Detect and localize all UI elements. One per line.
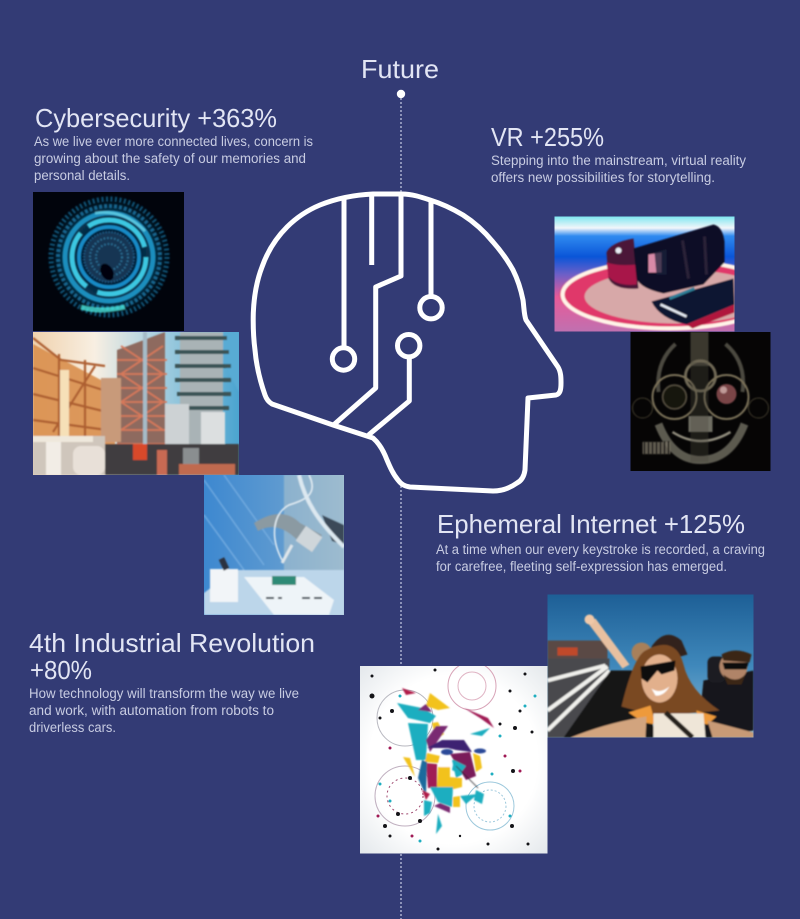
icon: circuit head (253, 194, 561, 491)
timeline start dot (397, 90, 405, 98)
heading: 4th Industrial Revolution (29, 628, 315, 658)
timeline dotted line (400, 98, 402, 919)
text block: 4th industrial revolution (29, 628, 315, 735)
photo: geometric polygon face (360, 666, 548, 854)
description (29, 686, 299, 735)
head outline (253, 194, 561, 491)
photo: VR headset (554, 216, 734, 332)
right node (420, 296, 442, 319)
description: driverless cars. (29, 720, 116, 735)
description: personal details. (34, 168, 130, 183)
circuit line with left node (342, 198, 346, 347)
heading: VR +255% (491, 122, 604, 152)
middle node (398, 334, 420, 357)
photo: industrial refinery (33, 332, 239, 475)
long bent circuit line (334, 195, 401, 425)
left node (332, 348, 355, 370)
short circuit line (369, 195, 374, 265)
circuit line with right node (428, 200, 434, 296)
description (491, 153, 746, 185)
description: At a time when our every keystroke is recorded, a craving (436, 542, 765, 557)
photo: robotic arm (204, 475, 344, 615)
photo: mechanical skull (630, 332, 770, 471)
heading: Ephemeral Internet +125% (437, 509, 745, 539)
description: for carefree, fleeting self-expression has emerged. (436, 559, 727, 574)
text block: ephemeral internet (436, 509, 765, 574)
title: Future (361, 54, 439, 84)
description: How technology will transform the way we live (29, 686, 299, 701)
heading (29, 628, 315, 685)
description (436, 542, 765, 574)
description: and work, with automation from robots to (29, 703, 274, 718)
description: Stepping into the mainstream, virtual reality (491, 153, 746, 168)
text block: VR (491, 122, 746, 185)
text block: cybersecurity (34, 103, 313, 183)
photo: friends selfie in convertible (548, 594, 754, 738)
heading: +80% (30, 655, 92, 685)
description: As we live ever more connected lives, concern is (34, 134, 313, 149)
circuit line from middle node (368, 357, 409, 435)
description: offers new possibilities for storytelling. (491, 170, 715, 185)
heading: Cybersecurity +363% (35, 103, 277, 133)
description (34, 134, 313, 183)
description: growing about the safety of our memories and (34, 151, 306, 166)
photo: cybersecurity fingerprint (33, 192, 184, 331)
